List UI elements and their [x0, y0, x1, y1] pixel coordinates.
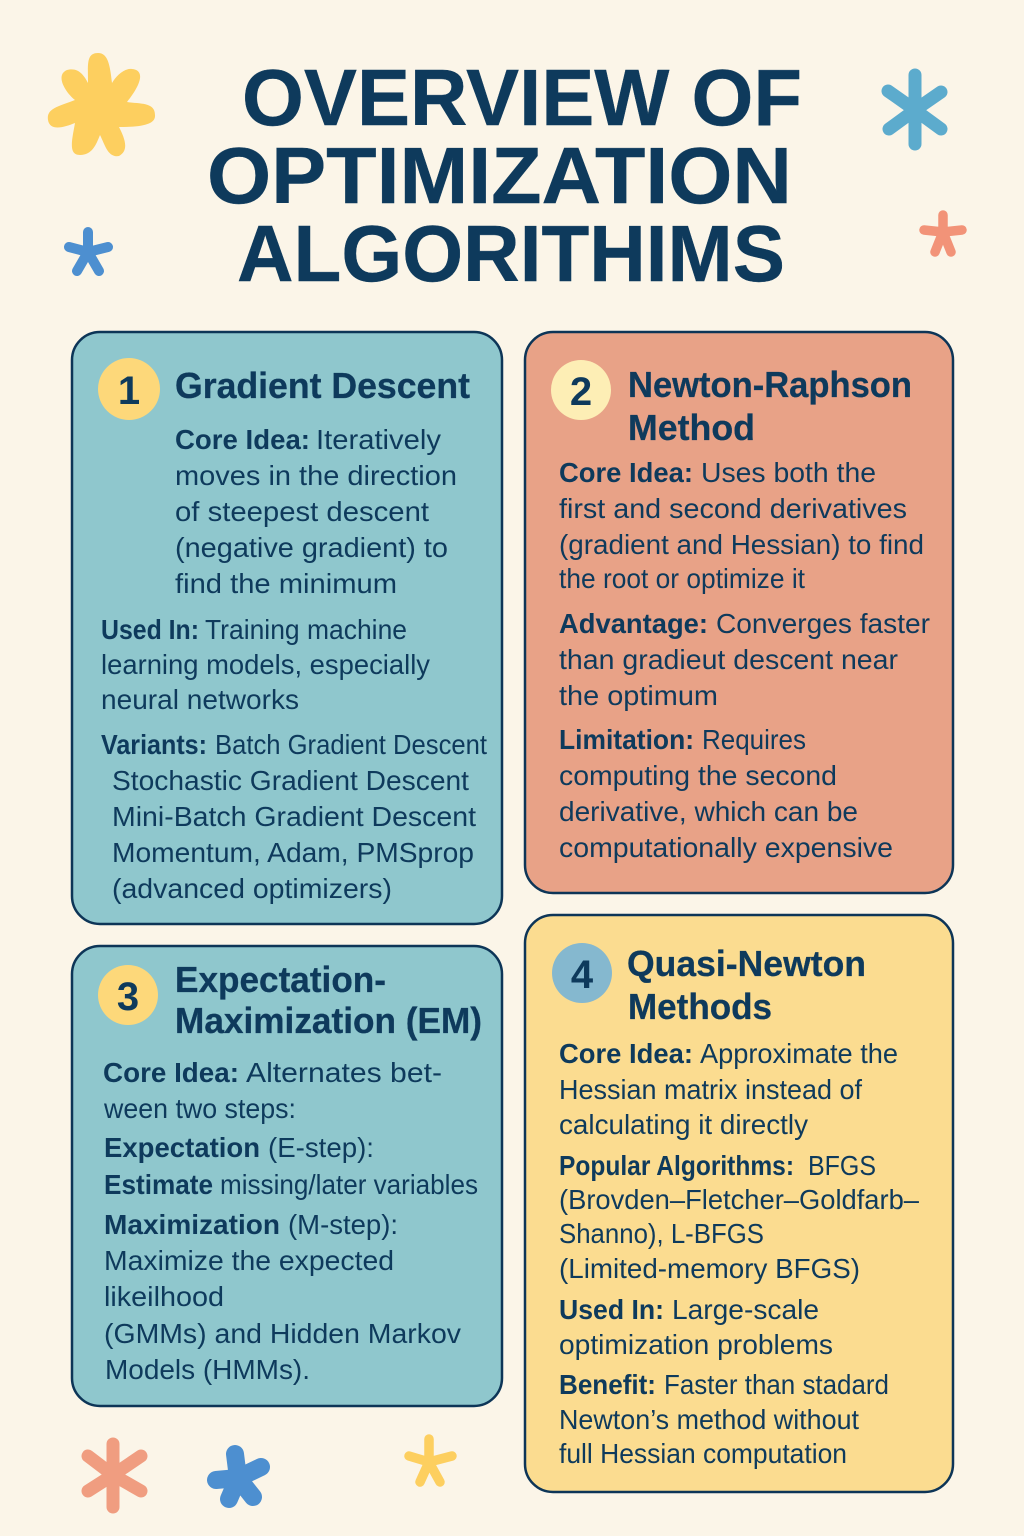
- number badge 4: [552, 943, 612, 1003]
- heading: newton-raphson method: Newton-Raphson: [628, 364, 912, 405]
- text: core idea: Core Idea:: [175, 424, 310, 455]
- text: core idea: of steepest descent: [175, 496, 429, 527]
- text: core idea: Iteratively: [316, 424, 441, 455]
- number badge 2: 2: [570, 370, 592, 414]
- text: variants: Mini-Batch Gradient Descent: [112, 801, 476, 832]
- text: limitation: Requires: [702, 724, 806, 755]
- title: ALGORITHIMS: [237, 209, 785, 298]
- text: popular algorithms: Shanno), L-BFGS: [559, 1218, 764, 1249]
- text: advantage: Converges faster: [716, 608, 930, 639]
- text: variants: Batch Gradient Descent: [215, 729, 487, 760]
- icon: small blue star left: [69, 232, 108, 271]
- text: used in: [559, 1294, 833, 1360]
- text: core idea: [175, 424, 457, 599]
- text: core idea: (gradient and Hessian) to find: [559, 529, 924, 560]
- text: maximization step: Maximize the expected: [104, 1245, 394, 1276]
- text: variants: Momentum, Adam, PMSprop: [112, 837, 474, 868]
- text: benefit: full Hessian computation: [559, 1438, 847, 1469]
- panel: expectation-maximization: [72, 946, 502, 1406]
- text: core idea: Uses both the: [701, 457, 876, 488]
- heading: quasi-newton methods: Methods: [628, 986, 772, 1027]
- text: maximization step: (M-step):: [288, 1209, 398, 1240]
- text: popular algorithms: Popular Algorithms:: [559, 1150, 794, 1181]
- icon: salmon asterisk bottom left: [88, 1444, 141, 1507]
- text: core idea: [559, 457, 924, 594]
- heading: gradient descent: Gradient Descent: [175, 365, 470, 406]
- text: maximization step: Maximization: [104, 1209, 280, 1240]
- text: used in: Training machine: [205, 614, 407, 645]
- text: variants: Stochastic Gradient Descent: [112, 765, 469, 796]
- text: benefit: Newton’s method without: [559, 1404, 859, 1435]
- text: benefit: [559, 1369, 889, 1469]
- text: core idea: ween two steps:: [103, 1093, 296, 1124]
- text: core idea: find the minimum: [175, 568, 397, 599]
- text: expectation step: [104, 1132, 478, 1200]
- text: used in: Large-scale: [672, 1294, 819, 1325]
- number badge 3: 3: [117, 975, 139, 1019]
- text: benefit: Faster than stadard: [664, 1369, 889, 1400]
- number badge 1: 1: [118, 369, 140, 413]
- icon: large yellow flower star: [48, 53, 155, 156]
- text: expectation step: missing/later variables: [220, 1169, 478, 1200]
- heading: quasi-newton methods: [627, 943, 866, 1027]
- text: used in: Used In:: [101, 614, 199, 645]
- title: OPTIMIZATION: [207, 131, 792, 220]
- icon: small salmon star right: [924, 215, 962, 252]
- text: used in: Used In:: [559, 1294, 664, 1325]
- text: popular algorithms: (Limited-memory BFGS): [559, 1253, 860, 1284]
- text: popular algorithms: BFGS: [808, 1150, 876, 1181]
- number badge 1: [98, 358, 160, 420]
- text: maximization step: likeilhood: [104, 1281, 224, 1312]
- text: advantage: Advantage:: [559, 608, 708, 639]
- text: variants: [101, 729, 487, 904]
- text: expectation step: (E-step):: [268, 1132, 374, 1163]
- heading: expectation-maximization: [175, 959, 482, 1041]
- text: limitation: derivative, which can be: [559, 796, 858, 827]
- text: maximization step: (GMMs) and Hidden Markov: [104, 1318, 461, 1349]
- heading: newton-raphson method: Method: [628, 407, 755, 448]
- panel: newton-raphson method: [525, 332, 953, 893]
- text: core idea: Alternates bet-: [246, 1057, 442, 1088]
- icon: blue star bottom: [216, 1454, 261, 1499]
- text: advantage: than gradieut descent near: [559, 644, 898, 675]
- text: core idea: the root or optimize it: [559, 563, 805, 594]
- text: expectation step: Expectation: [104, 1132, 260, 1163]
- text: core idea: moves in the direction: [175, 460, 457, 491]
- panel: quasi-newton methods: [525, 915, 953, 1492]
- text: benefit: Benefit:: [559, 1369, 656, 1400]
- text: limitation: computationally expensive: [559, 832, 893, 863]
- title: OVERVIEW OF: [242, 53, 802, 142]
- text: core idea: Core Idea:: [103, 1057, 239, 1088]
- text: popular algorithms: [559, 1150, 919, 1284]
- text: core idea: Approximate the: [700, 1038, 898, 1069]
- text: core idea: calculating it directly: [559, 1109, 808, 1140]
- heading: newton-raphson method: [628, 364, 912, 448]
- icon: blue asterisk top right: [888, 75, 941, 144]
- text: limitation: computing the second: [559, 760, 837, 791]
- text: advantage: the optimum: [559, 680, 718, 711]
- text: used in: neural networks: [101, 684, 299, 715]
- text: core idea: [559, 1038, 898, 1140]
- text: core idea: first and second derivatives: [559, 493, 907, 524]
- text: used in: optimization problems: [559, 1329, 833, 1360]
- title: [207, 53, 802, 298]
- text: used in: [101, 614, 430, 715]
- text: core idea: [103, 1057, 442, 1124]
- text: core idea: Core Idea:: [559, 1038, 693, 1069]
- heading: quasi-newton methods: Quasi-Newton: [627, 943, 866, 984]
- number badge 4: 4: [571, 953, 594, 997]
- text: advantage: [559, 608, 930, 711]
- text: core idea: Core Idea:: [559, 457, 693, 488]
- text: variants: (advanced optimizers): [112, 873, 392, 904]
- text: used in: learning models, especially: [101, 649, 430, 680]
- heading: expectation-maximization: Maximization (EM): [175, 1000, 482, 1041]
- heading: expectation-maximization: Expectation-: [175, 959, 386, 1000]
- text: limitation: Limitation:: [559, 724, 694, 755]
- panel: gradient descent: [72, 332, 502, 924]
- number badge 2: [551, 360, 611, 420]
- text: expectation step: Estimate: [104, 1169, 213, 1200]
- text: popular algorithms: (Brovden–Fletcher–Goldfarb–: [559, 1184, 919, 1215]
- text: maximization step: Models (HMMs).: [105, 1354, 310, 1385]
- icon: yellow star bottom: [409, 1439, 452, 1482]
- number badge 3: [98, 965, 158, 1025]
- text: variants: Variants:: [101, 729, 207, 760]
- text: core idea: (negative gradient) to: [175, 532, 448, 563]
- text: limitation: [559, 724, 893, 863]
- text: core idea: Hessian matrix instead of: [559, 1074, 862, 1105]
- text: maximization step: [104, 1209, 461, 1385]
